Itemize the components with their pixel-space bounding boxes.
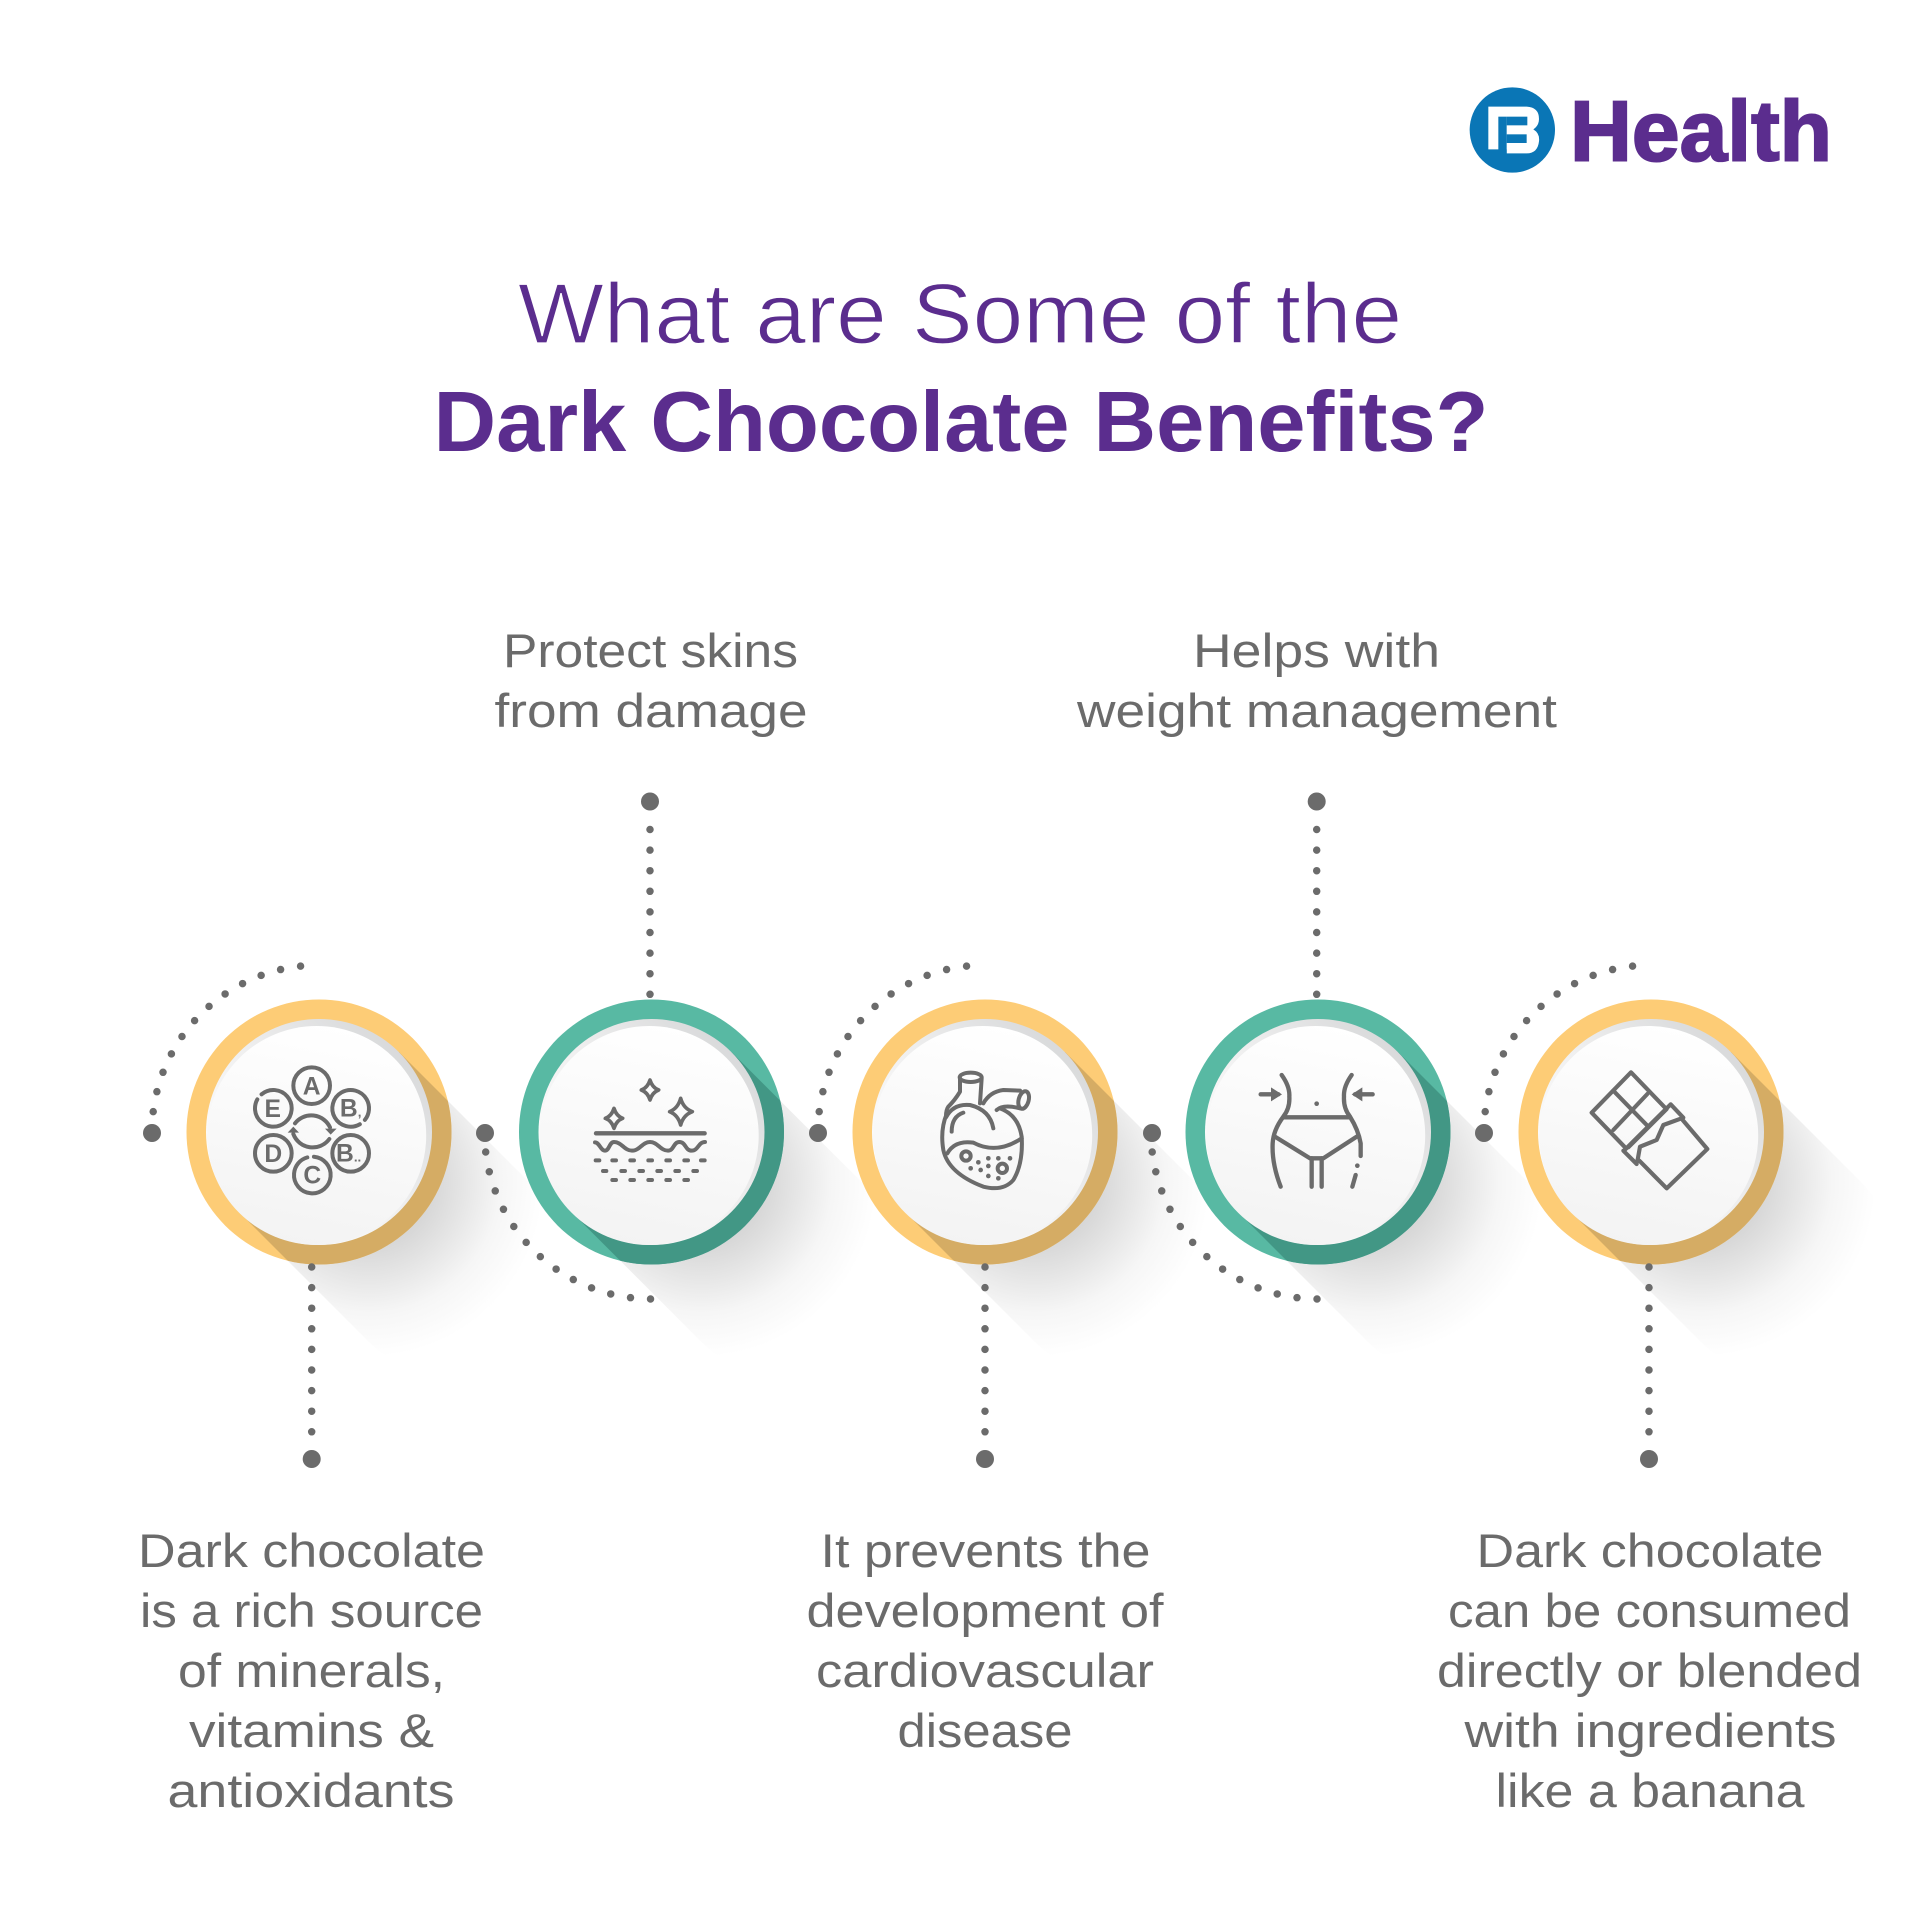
arc above circle 3 bbox=[819, 966, 968, 1112]
text: consumption: can be consumed bbox=[1448, 1584, 1851, 1637]
arc below circle 4 bbox=[1152, 1152, 1318, 1299]
text: weight management: Helps with bbox=[1193, 624, 1440, 677]
icon: vitamins: D bbox=[264, 1141, 282, 1168]
circle 2: skin bbox=[519, 1000, 836, 1318]
text: rich source: vitamins & bbox=[189, 1704, 434, 1757]
icon: vitamins: B.. bbox=[336, 1140, 361, 1167]
text: cardiovascular disease: cardiovascular bbox=[816, 1644, 1154, 1697]
text: consumption: like a banana bbox=[1496, 1764, 1805, 1817]
circle 1: vitamins and minerals bbox=[186, 1000, 504, 1318]
logo: Bajaj Finserv Health bbox=[1470, 84, 1832, 180]
title line 2: Dark Chocolate Benefits? bbox=[434, 375, 1488, 470]
text: rich source: of minerals, bbox=[178, 1644, 445, 1697]
text: rich source: is a rich source bbox=[140, 1584, 483, 1637]
text: consumption: with ingredients bbox=[1463, 1704, 1836, 1757]
text: rich source: Dark chocolate bbox=[138, 1524, 485, 1577]
circle 3: heart bbox=[852, 1000, 1170, 1318]
icon: waist bbox=[1261, 1075, 1373, 1187]
text: cardiovascular disease: It prevents the bbox=[820, 1524, 1150, 1577]
dotted connectors bbox=[143, 792, 1658, 1468]
icon: chocolate bar bbox=[1592, 1072, 1707, 1188]
arc above circle 1 bbox=[153, 966, 302, 1112]
text: consumption: Dark chocolate bbox=[1476, 1524, 1824, 1577]
text: consumption bbox=[1437, 1524, 1862, 1817]
vertical line to text 4 bbox=[1313, 829, 1320, 994]
text: cardiovascular disease: development of bbox=[806, 1584, 1165, 1637]
icon: vitamins: A bbox=[303, 1074, 321, 1101]
text: protect skins bbox=[494, 624, 808, 737]
icon: vitamins bbox=[248, 1067, 376, 1195]
text: rich source: antioxidants bbox=[168, 1764, 454, 1817]
text: rich source bbox=[138, 1524, 485, 1817]
text: cardiovascular disease: disease bbox=[898, 1704, 1072, 1757]
text: consumption: directly or blended bbox=[1437, 1644, 1862, 1697]
icon: heart bbox=[942, 1073, 1031, 1188]
logo mark bbox=[1470, 87, 1555, 173]
vertical line to text 2 bbox=[646, 829, 654, 994]
text: weight management bbox=[1076, 624, 1557, 737]
vertical line to text 3 bbox=[981, 1267, 989, 1433]
text: cardiovascular disease bbox=[806, 1524, 1165, 1757]
logo wordmark: Health bbox=[1570, 84, 1832, 180]
icon: vitamins: B, bbox=[340, 1096, 361, 1123]
connector end dots bbox=[143, 792, 1658, 1468]
vertical line to text 1 bbox=[308, 1267, 315, 1433]
circle 5: chocolate bbox=[1518, 1000, 1836, 1318]
icon: vitamins: E bbox=[264, 1096, 281, 1123]
title line 1: What are Some of the bbox=[518, 267, 1402, 362]
icon: vitamins: C bbox=[303, 1163, 321, 1190]
vertical line to text 5 bbox=[1645, 1267, 1653, 1433]
text: protect skins: from damage bbox=[494, 684, 808, 737]
circle 4: weight bbox=[1186, 1000, 1504, 1318]
title bbox=[434, 267, 1488, 470]
icon: skin bbox=[595, 1080, 705, 1180]
arc above circle 5 bbox=[1485, 966, 1634, 1112]
arc below circle 2 bbox=[486, 1152, 652, 1299]
text: weight management: weight management bbox=[1076, 684, 1557, 737]
text: protect skins: Protect skins bbox=[503, 624, 798, 677]
